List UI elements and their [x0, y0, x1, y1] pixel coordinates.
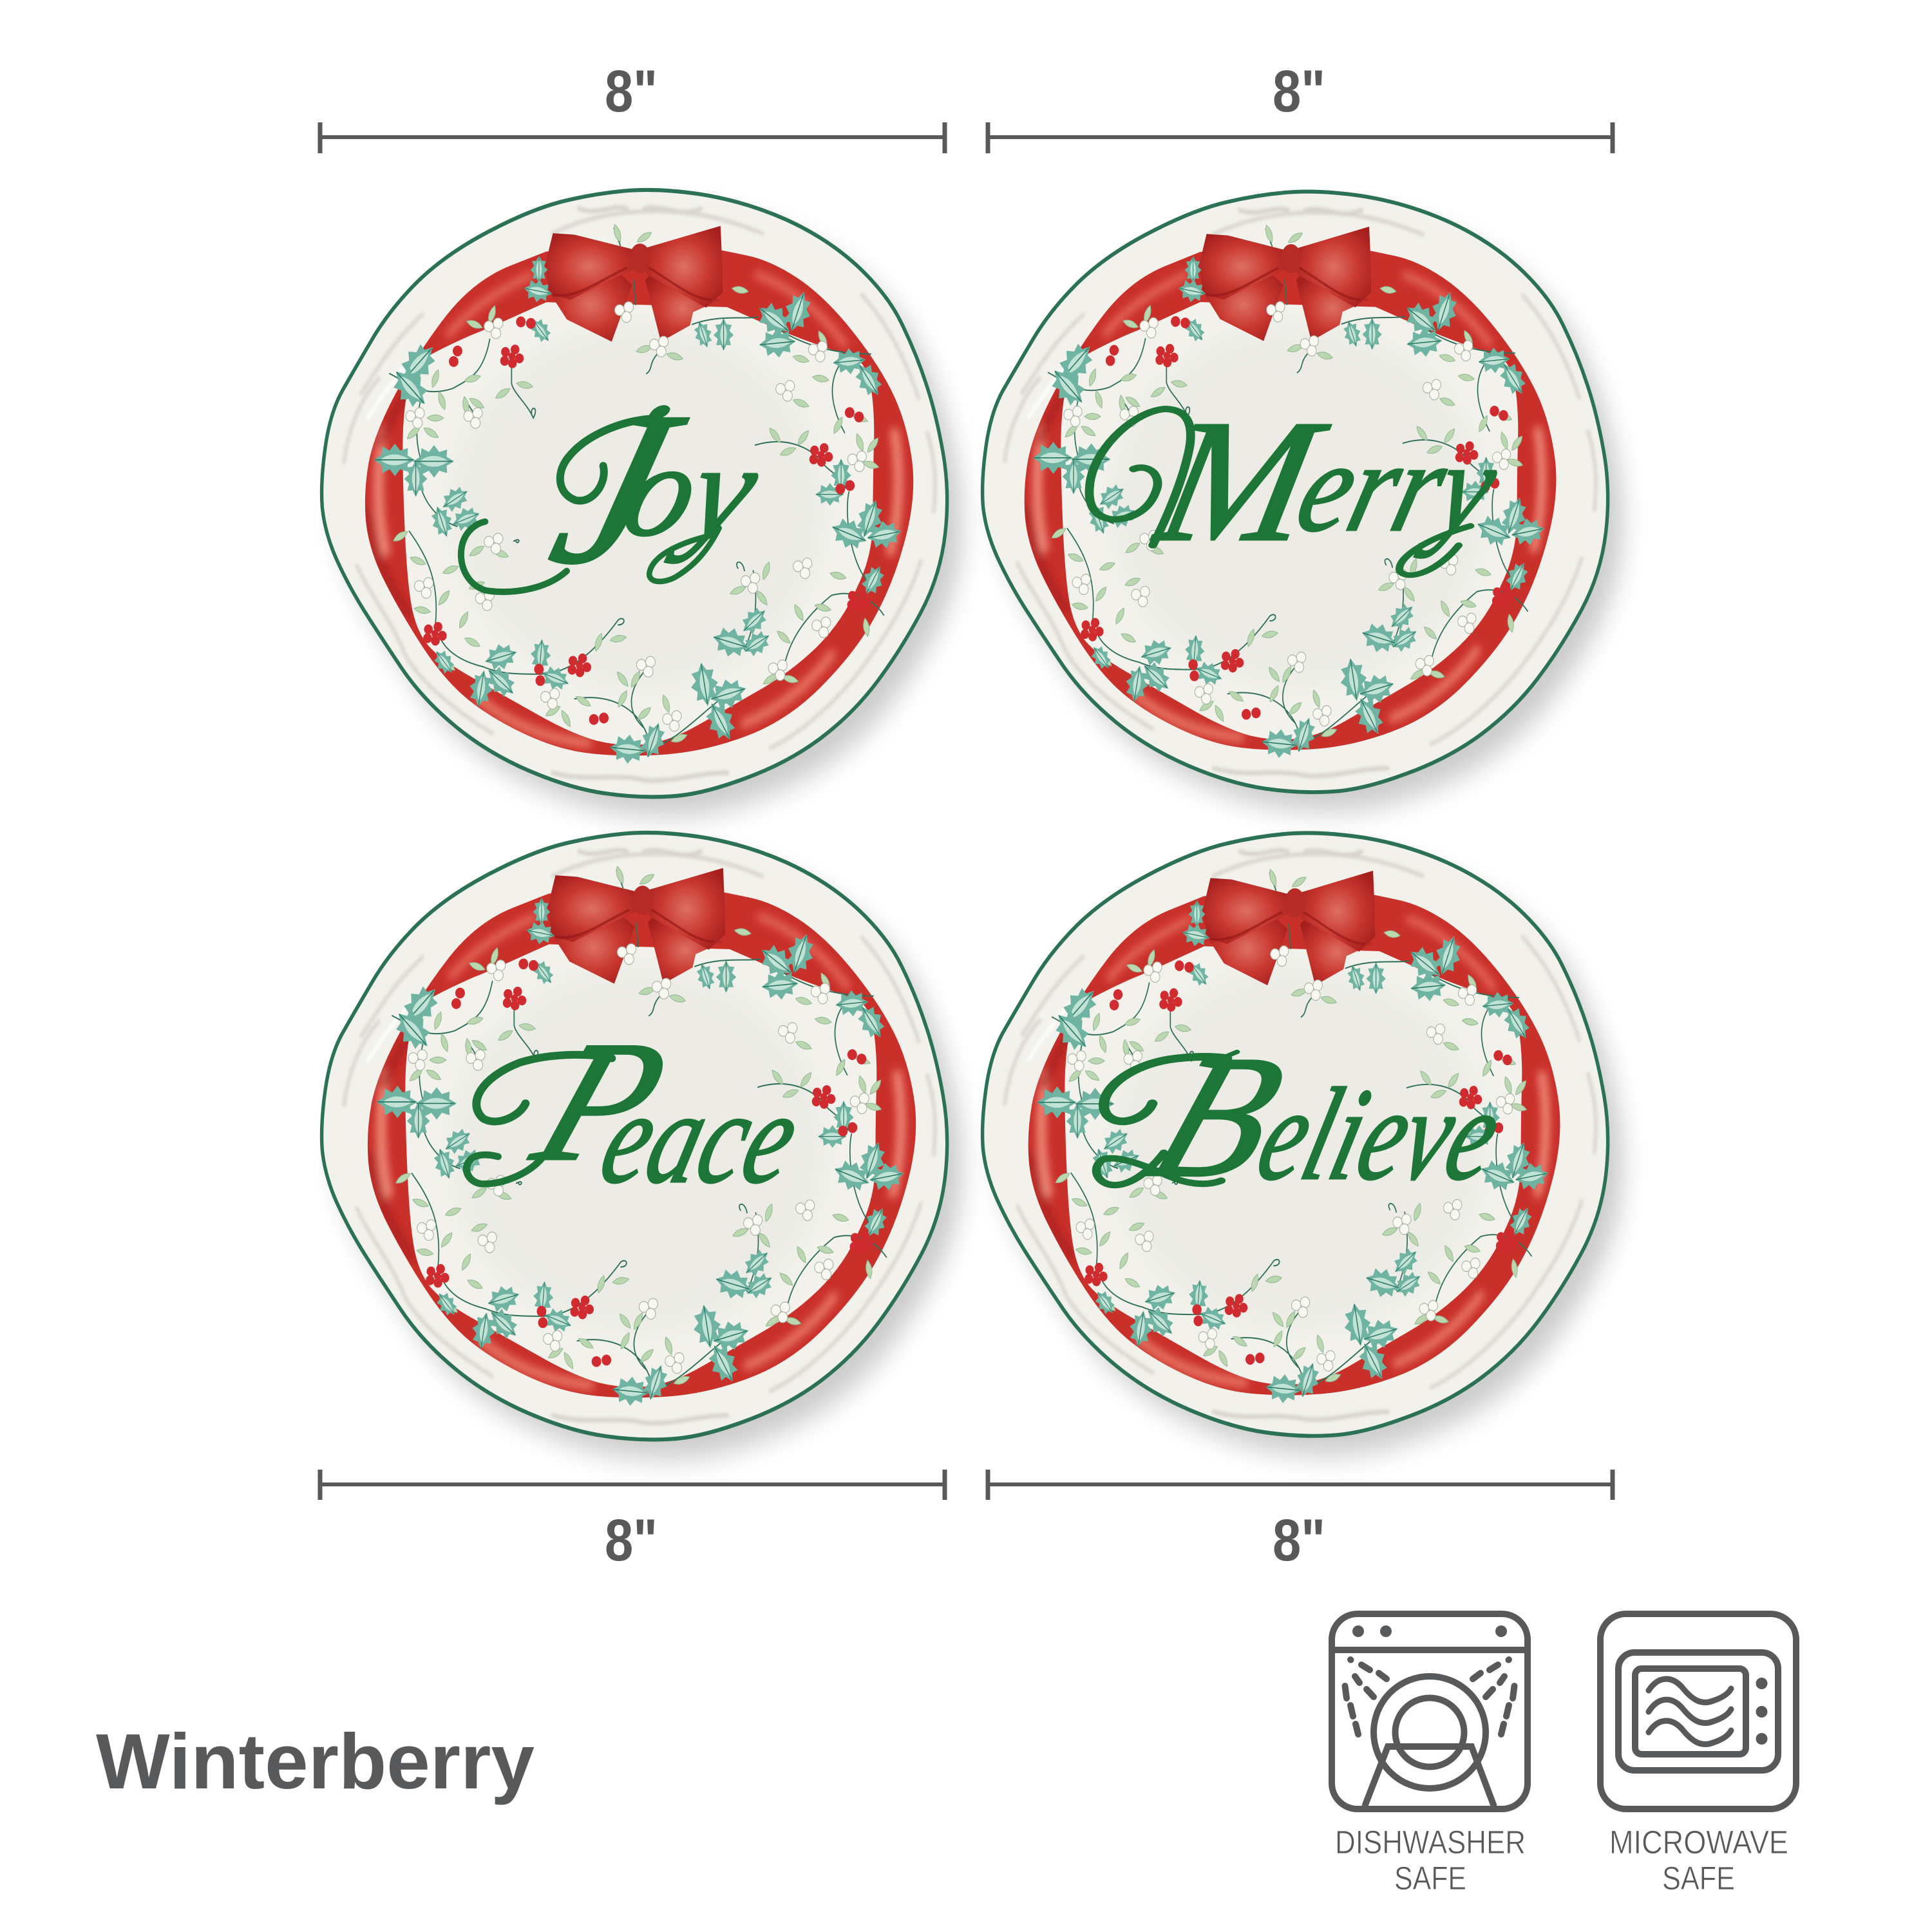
plate body	[322, 190, 947, 797]
plate shadow	[337, 210, 962, 817]
dimension: top right 8 inch: 8"	[1273, 59, 1325, 124]
word: Merry: erry	[1284, 416, 1512, 558]
wreath: ribbon, bow and holly	[368, 866, 916, 1408]
dimension: top left 8 inch	[320, 59, 945, 153]
plate: Merry	[983, 191, 1623, 811]
plate body	[322, 833, 947, 1439]
word: Joy	[461, 366, 773, 609]
label: microwave safe: MICROWAVE	[1609, 1824, 1788, 1861]
dimension: top right 8 inch	[988, 59, 1613, 153]
dimension: bottom left 8 inch: 8"	[605, 1508, 658, 1573]
wreath: ribbon, bow and holly	[365, 223, 913, 766]
wreath: ribbon, bow and holly	[1025, 224, 1556, 760]
icon: dishwasher	[1332, 1614, 1528, 1809]
word: Peace: P	[512, 1005, 690, 1197]
word: Peace: eace	[588, 1065, 813, 1211]
dimension: top left 8 inch: 8"	[605, 59, 658, 124]
plate body	[983, 833, 1608, 1436]
label: microwave safe: SAFE	[1662, 1860, 1735, 1897]
word: Merry	[1089, 384, 1512, 578]
wreath: ribbon, bow and holly	[1028, 868, 1560, 1405]
plate: Joy	[322, 190, 962, 817]
word: Believe: elieve	[1245, 1061, 1515, 1208]
plate shadow	[998, 211, 1623, 811]
label: dishwasher safe: SAFE	[1394, 1860, 1466, 1897]
word: Believe: B	[1129, 1019, 1307, 1213]
title: Winterberry: Winterberry	[96, 1718, 535, 1805]
plate shadow	[998, 853, 1623, 1455]
word: Joy: J	[532, 366, 703, 609]
dimension: bottom right 8 inch	[988, 1470, 1613, 1573]
word: Merry: M	[1142, 384, 1342, 578]
icon: microwave	[1600, 1614, 1796, 1809]
plate shadow	[337, 853, 962, 1459]
dimension: bottom left 8 inch	[320, 1470, 945, 1573]
word: Peace	[467, 1005, 813, 1211]
word: Believe	[1096, 1019, 1515, 1213]
word: Joy: oy	[609, 417, 773, 564]
plate: Peace	[322, 833, 962, 1459]
plate body	[983, 191, 1608, 792]
label: dishwasher safe: DISHWASHER	[1335, 1824, 1526, 1861]
dimension: bottom right 8 inch: 8"	[1273, 1508, 1325, 1573]
plate: Believe	[983, 833, 1623, 1455]
